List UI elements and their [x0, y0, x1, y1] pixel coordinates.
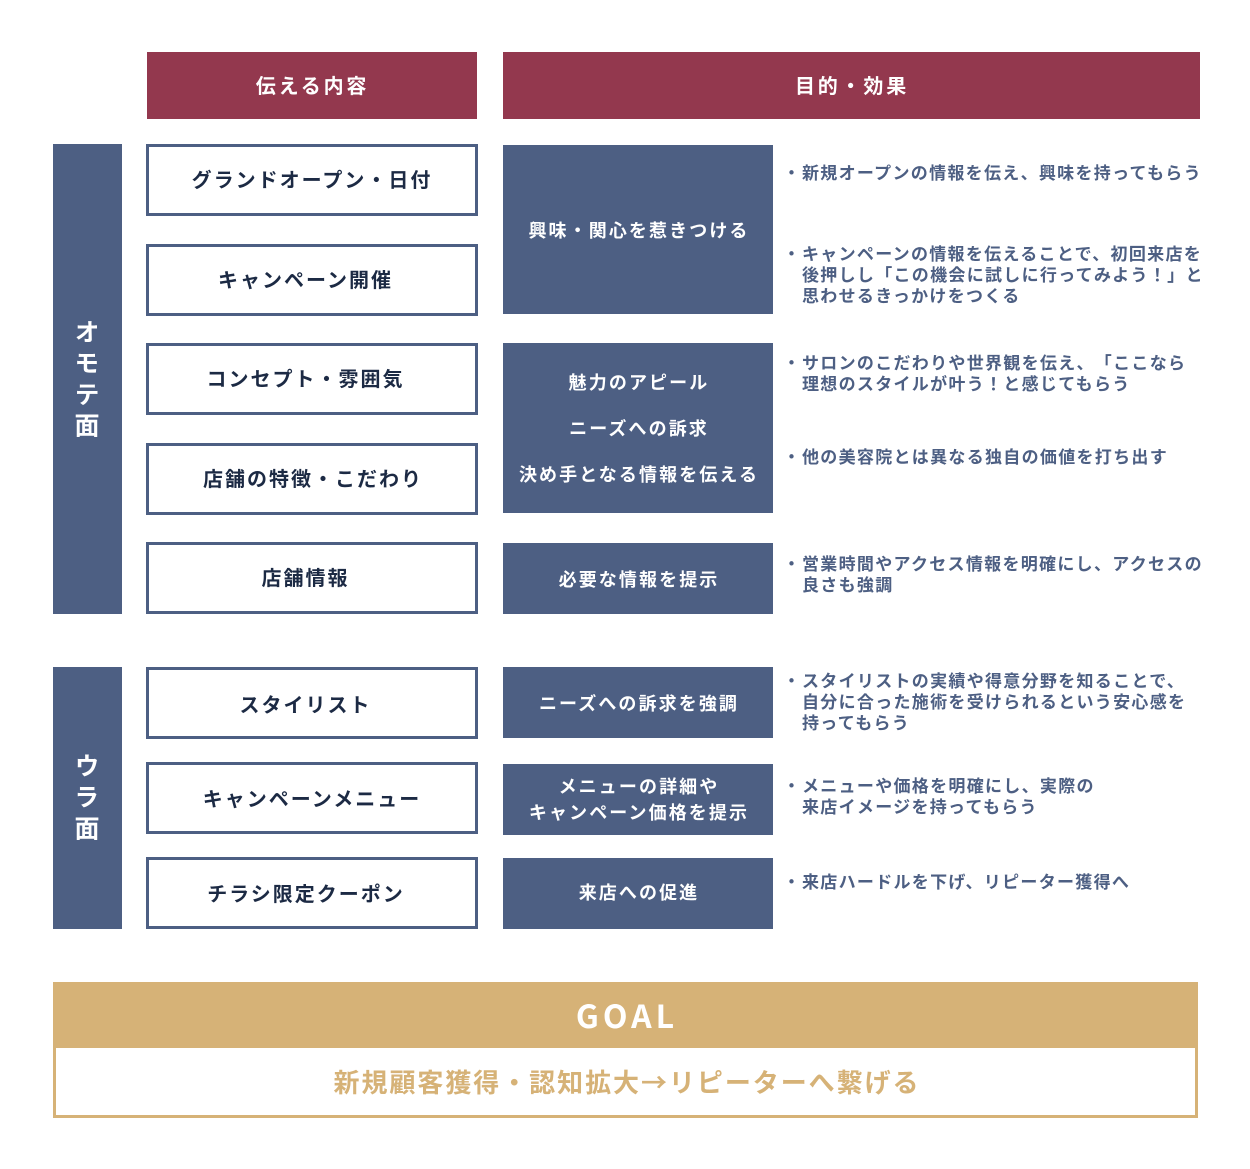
- goal statement: [53, 1048, 1198, 1118]
- effect text: stylist: スタイリストの実績や得意分野を知ることで、: [802, 672, 1185, 691]
- effect text: stylist: ・: [783, 672, 800, 691]
- effect text: hours and access: ・: [783, 555, 800, 574]
- effect text: menu: 来店イメージを持ってもらう: [802, 798, 1038, 817]
- effect text: stylist: 自分に合った施術を受けられるという安心感を: [802, 693, 1186, 712]
- header: purpose and effect: [503, 52, 1200, 119]
- effect text: campaign: 後押しし「この機会に試しに行ってみよう！」と: [802, 266, 1204, 285]
- purpose: necessary information: 必要な情報を提示: [559, 570, 719, 590]
- purpose: necessary information: [503, 543, 773, 614]
- effect text: unique value: 他の美容院とは異なる独自の価値を打ち出す: [802, 448, 1168, 467]
- purpose: promote visit: 来店への促進: [579, 882, 699, 902]
- item: store information: [146, 542, 478, 614]
- item: stylist: スタイリスト: [240, 694, 372, 716]
- side label: front side: オモテ面: [71, 319, 99, 443]
- effect text: hours and access: [783, 555, 1203, 595]
- effect text: stylist: 持ってもらう: [802, 714, 910, 733]
- item: coupon: [146, 857, 478, 929]
- header: content to convey: 伝える内容: [256, 76, 369, 98]
- side label: back side: [53, 667, 122, 929]
- purpose: appeal: 魅力のアピール: [569, 373, 709, 393]
- effect text: hours and access: 営業時間やアクセス情報を明確にし、アクセスの: [802, 555, 1203, 574]
- item: campaign menu: キャンペーンメニュー: [203, 788, 421, 810]
- effect text: menu: メニューや価格を明確にし、実際の: [802, 777, 1095, 796]
- purpose: raise interest: 興味・関心を惹きつける: [528, 220, 750, 240]
- item: campaign: [146, 244, 478, 316]
- effect text: salon world view: 理想のスタイルが叶う！と感じてもらう: [802, 375, 1131, 394]
- purpose: appeal: ニーズへの訴求: [569, 419, 709, 439]
- item: store features: [146, 443, 478, 515]
- purpose: appeal: [503, 343, 773, 513]
- goal statement: 新規顧客獲得・認知拡大→リピーターへ繋げる: [334, 1063, 920, 1100]
- effect text: campaign: ・: [783, 245, 800, 264]
- effect text: lower hurdle: ・: [783, 873, 800, 892]
- item: campaign menu: [146, 762, 478, 834]
- effect text: lower hurdle: 来店ハードルを下げ、リピーター獲得へ: [802, 873, 1130, 892]
- effect text: new opening: ・: [783, 164, 800, 183]
- purpose: menu and price: メニューの詳細や: [559, 776, 719, 796]
- item: grand opening date: [146, 144, 478, 216]
- effect text: campaign: キャンペーンの情報を伝えることで、初回来店を: [802, 245, 1202, 264]
- item: grand opening date: グランドオープン・日付: [192, 170, 432, 192]
- effect text: menu: [783, 777, 1095, 817]
- effect text: menu: ・: [783, 777, 800, 796]
- purpose: menu and price: キャンペーン価格を提示: [529, 802, 749, 822]
- item: store information: 店舗情報: [262, 568, 350, 590]
- effect text: hours and access: 良さも強調: [802, 576, 894, 595]
- purpose: raise interest: [503, 145, 773, 314]
- purpose: appeal to needs: ニーズへの訴求を強調: [539, 694, 739, 714]
- goal banner: [53, 982, 1198, 1048]
- effect text: campaign: [783, 245, 1204, 306]
- effect text: salon world view: [783, 354, 1186, 394]
- item: campaign: キャンペーン開催: [218, 270, 393, 292]
- item: coupon: チラシ限定クーポン: [207, 884, 405, 906]
- effect text: new opening: 新規オープンの情報を伝え、興味を持ってもらう: [802, 164, 1202, 183]
- item: stylist: [146, 667, 478, 739]
- item: concept and atmosphere: [146, 343, 478, 415]
- side label: front side: [53, 144, 122, 614]
- effect text: campaign: 思わせるきっかけをつくる: [802, 287, 1021, 306]
- purpose: appeal to needs: [503, 667, 773, 738]
- purpose: promote visit: [503, 858, 773, 929]
- side label: back side: ウラ面: [71, 753, 99, 847]
- header: purpose and effect: 目的・効果: [795, 76, 909, 98]
- goal banner: GOAL: [576, 992, 678, 1038]
- purpose: menu and price: [503, 764, 773, 835]
- effect text: stylist: [783, 672, 1186, 733]
- effect text: salon world view: サロンのこだわりや世界観を伝え、「ここなら: [802, 354, 1186, 373]
- item: store features: 店舗の特徴・こだわり: [203, 468, 423, 490]
- item: concept and atmosphere: コンセプト・雰囲気: [206, 368, 404, 390]
- effect text: unique value: ・: [783, 448, 800, 467]
- purpose: appeal: 決め手となる情報を伝える: [519, 465, 759, 485]
- effect text: salon world view: ・: [783, 354, 800, 373]
- header: content to convey: [147, 52, 477, 119]
